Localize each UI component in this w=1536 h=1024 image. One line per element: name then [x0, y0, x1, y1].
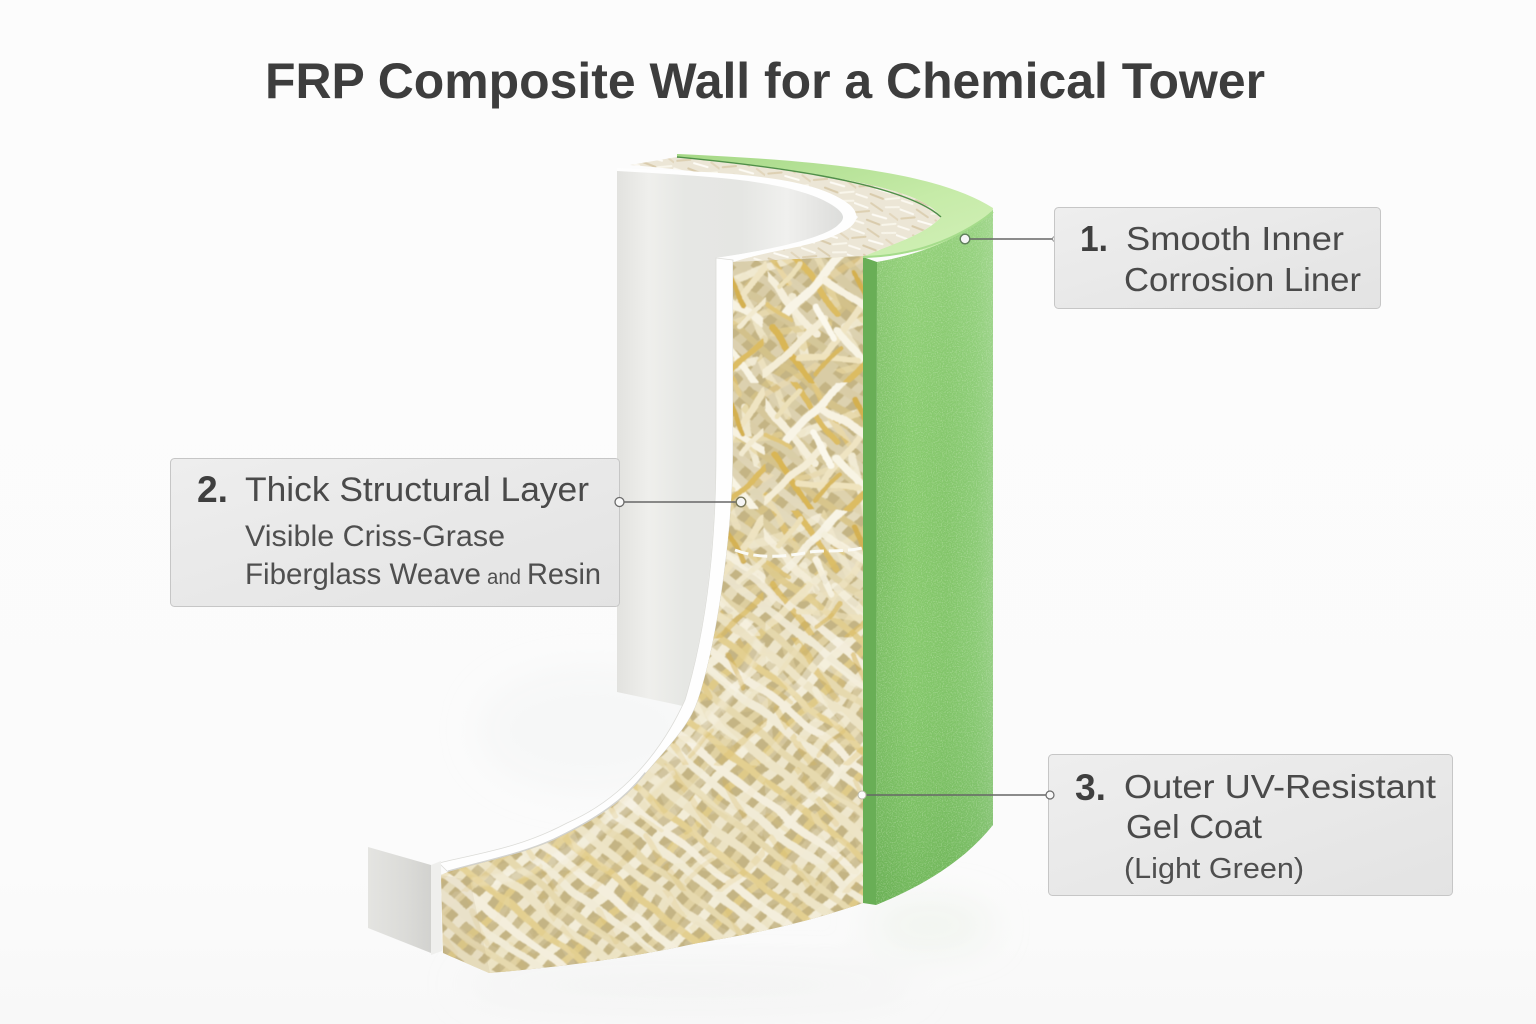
leader anchor 3: [1046, 791, 1054, 799]
inner liner back wall: [617, 170, 843, 706]
composite wall cutaway illustration: [368, 154, 1000, 1010]
callout 2: thick structural layer: Visible Criss-Grase: [245, 520, 505, 553]
outer gel coat top surface: [677, 154, 993, 258]
white corrosion liner strip: [439, 258, 733, 872]
leader anchor 2: [615, 498, 624, 506]
callout 2: thick structural layer: and: [487, 566, 521, 589]
callout 1: smooth inner corrosion liner: 1.: [1080, 218, 1108, 259]
callout 2: thick structural layer: Thick Structural Layer: [245, 471, 589, 509]
callout 3: outer UV-resistant gel coat: 3.: [1075, 767, 1106, 808]
callout 3: outer UV-resistant gel coat: Gel Coat: [1126, 808, 1262, 845]
callout 2: thick structural layer: [170, 458, 624, 606]
callout 2: thick structural layer: Resin: [527, 558, 601, 591]
liner top rim: [617, 168, 856, 262]
title: FRP Composite Wall for a Chemical Tower: [265, 53, 1265, 109]
callout 3: outer UV-resistant gel coat: (Light Green): [1124, 853, 1304, 885]
callout 1: smooth inner corrosion liner: Corrosion Liner: [1124, 261, 1361, 298]
liner end block: [368, 847, 442, 955]
callout 2: thick structural layer: Fiberglass Weave: [245, 558, 481, 591]
structural fiberglass layer: [441, 256, 863, 973]
leader line 2: [620, 497, 746, 507]
callout 2: thick structural layer: 2.: [197, 469, 228, 510]
callout 3: outer UV-resistant gel coat: Outer UV-Resistant: [1124, 768, 1436, 805]
floor shadows: [460, 670, 990, 995]
callout 3: outer UV-resistant gel coat: [1046, 754, 1452, 896]
leader line 3: [858, 791, 1050, 799]
structural layer top surface: [630, 157, 941, 262]
callout 1: smooth inner corrosion liner: [1054, 208, 1380, 308]
leader line 1: [960, 234, 1058, 244]
outer green gel coat face: [863, 205, 1000, 910]
callout 1: smooth inner corrosion liner: Smooth Inner: [1126, 220, 1344, 257]
